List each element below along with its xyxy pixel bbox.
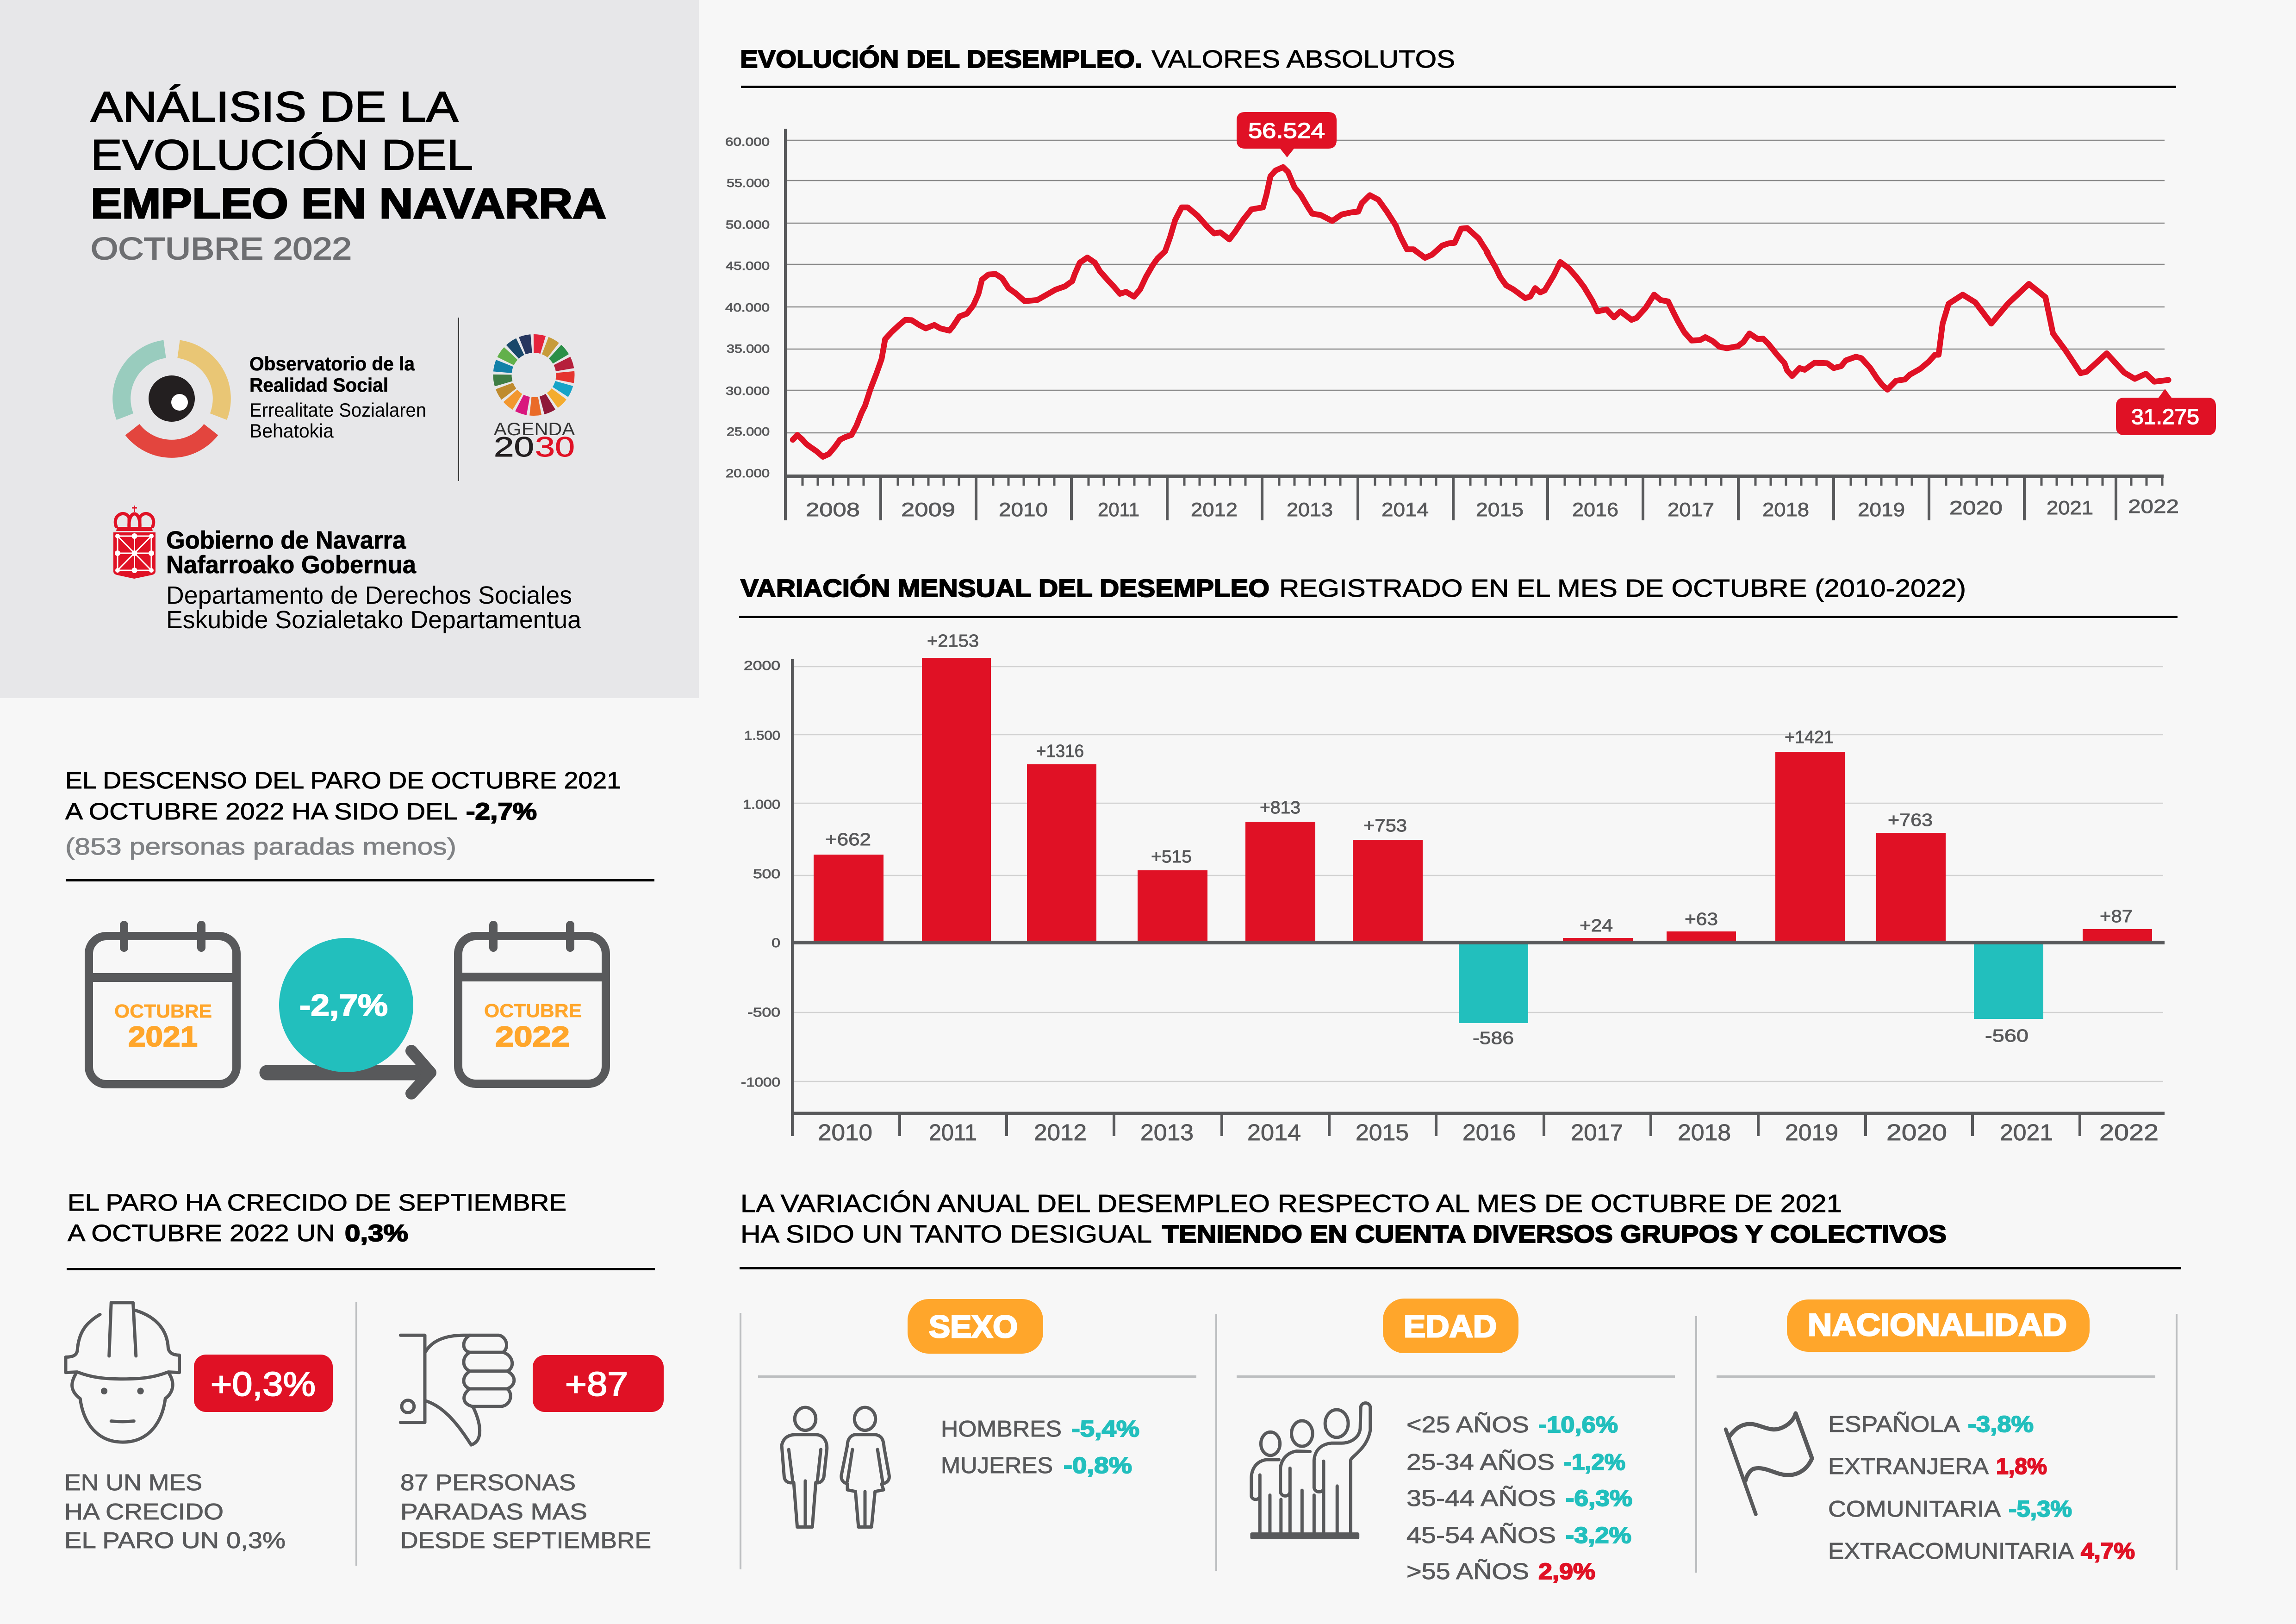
text: Gobierno de Navarra: Eskubide Sozialetako Departamentua [166,606,582,634]
bar value labels: +24 [1580,916,1613,936]
text: Gobierno de Navarra: Nafarroako Gobernua [166,551,417,579]
y axis labels: -1000 [741,1075,780,1089]
data: edad: 35-44 AÑOS [1406,1486,1556,1511]
x axis labels: 2010 [999,499,1048,520]
bar value labels: -560 [1985,1026,2028,1046]
panel: edad [1251,1299,1632,1584]
y axis labels: 0 [772,936,780,950]
data: edad: 25-34 AÑOS [1406,1450,1555,1475]
x axis labels: 2020 [1886,1120,1947,1145]
bar chart: variación mensual [741,631,2165,1145]
text block: descenso: -2,7% [466,798,537,824]
logo: Agenda 2030: 30 [535,431,575,462]
y axis labels: 60.000 [725,136,770,149]
logo: Observatorio de la Realidad Social: Errealitate Sozialaren [249,399,426,421]
chart axes [791,659,2165,1136]
badge: -2,7%: -2,7% [299,988,388,1022]
data: edad: <25 AÑOS [1406,1412,1529,1437]
x axis labels: 2022 [2099,1120,2159,1145]
text block: en un mes: EN UN MES [64,1470,202,1495]
y axis labels: 20.000 [726,467,770,480]
logo: Observatorio de la Realidad Social [122,349,426,449]
y axis labels: 45.000 [726,260,770,273]
callout: maximum 56.524: 56.524 [1248,119,1325,143]
data: nacionalidad: 1,8% [1996,1454,2047,1479]
y axis labels [725,136,770,480]
data: nacionalidad: EXTRANJERA [1828,1454,1989,1479]
data: edad: 2,9% [1538,1559,1595,1584]
data: edad: -3,2% [1566,1523,1631,1548]
text block: crecimiento: 0,3% [345,1220,408,1246]
bar value labels [825,631,2133,1048]
chart axes [785,129,2164,520]
data: nacionalidad: COMUNITARIA [1828,1497,2001,1522]
y axis labels: 2000 [744,658,780,673]
x axis labels: 2018 [1762,499,1809,520]
panel: sexo [782,1299,1139,1527]
icon: thumb down [400,1335,514,1445]
heading: evolución del desempleo [740,45,2176,88]
pill: sexo [908,1299,1043,1354]
text block: descenso: EL DESCENSO DEL PARO DE OCTUBRE 2021 [65,767,621,793]
heading: variación mensual: VARIACIÓN MENSUAL DEL DESEMPLEO [740,575,1269,602]
x axis labels: 2021 [2047,497,2093,518]
icon: group of people [1251,1403,1370,1537]
data: edad: -6,3% [1566,1486,1632,1511]
text block: en un mes: EL PARO UN 0,3% [64,1528,286,1553]
x axis labels: 2008 [806,499,860,520]
x axis labels: 2016 [1462,1120,1516,1145]
text: Gobierno de Navarra: Gobierno de Navarra [166,526,406,554]
icon: worker with helmet [66,1303,180,1442]
text block: 87 personas [400,1470,651,1553]
data: edad: 45-54 AÑOS [1406,1523,1556,1548]
text block: crecimiento: A OCTUBRE 2022 UN [68,1220,335,1246]
panel: nacionalidad [1726,1299,2135,1564]
heading: variación anual [740,1190,2181,1269]
x axis labels: 2020 [1949,497,2003,518]
icon: calendar 2021: OCTUBRE [114,1000,212,1022]
bar value labels: +63 [1685,910,1718,929]
pill: nacionalidad [1787,1299,2090,1352]
y axis labels: 500 [753,867,780,881]
bar value labels: +515 [1151,847,1192,867]
x axis labels: 2014 [1247,1120,1301,1145]
y axis labels: 1.500 [744,728,780,743]
data line [793,167,2168,457]
title: EMPLEO EN NAVARRA [91,180,606,227]
text block: descenso: (853 personas paradas menos) [65,833,456,860]
logo: Agenda 2030: AGENDA [494,419,575,439]
data: edad [1406,1412,1632,1584]
data: edad: -1,2% [1564,1450,1625,1475]
x axis labels: 2015 [1476,499,1524,520]
x axis labels: 2017 [1668,499,1714,520]
y axis labels [741,658,780,1089]
y axis labels: 55.000 [727,177,770,190]
data: sexo: MUJERES [941,1453,1053,1478]
arrow [267,1051,430,1093]
data: edad: -10,6% [1538,1412,1618,1437]
heading: evolución del desempleo: EVOLUCIÓN DEL DESEMPLEO. [740,45,1142,73]
logo: Gobierno de Navarra coat of arms [113,506,156,579]
text block: en un mes: HA CRECIDO [64,1499,224,1524]
heading: variación mensual [739,575,2178,618]
icon: calendar 2022: OCTUBRE [484,1000,582,1021]
callout: current 31.275 [2116,389,2216,435]
bar value labels: +1421 [1785,728,1834,747]
text block: descenso: A OCTUBRE 2022 HA SIDO DEL [65,798,458,824]
x axis labels: 2021 [2000,1120,2053,1145]
badge: +87 [533,1355,664,1412]
heading: variación anual: LA VARIACIÓN ANUAL DEL DESEMPLEO RESPECTO AL MES DE OCTUBRE DE 2021 [740,1190,1842,1218]
data: edad: >55 AÑOS [1406,1559,1529,1584]
bar value labels: +2153 [927,631,979,651]
text block: en un mes [64,1470,286,1553]
x axis labels: 2011 [929,1120,977,1145]
logo: Observatorio de la Realidad Social: Behatokia [249,420,334,442]
bars [814,658,2152,1023]
heading: variación anual: HA SIDO UN TANTO DESIGUAL [740,1220,1152,1248]
panel: title and logos [0,0,699,698]
y axis labels: 30.000 [726,385,770,398]
bar value labels: +87 [2100,907,2133,926]
icon: calendar 2021 [85,925,241,1084]
x axis labels [806,495,2179,520]
data: sexo: HOMBRES [941,1417,1062,1442]
text block: crecimiento [67,1189,655,1270]
data: nacionalidad: EXTRACOMUNITARIA [1828,1539,2074,1564]
y axis labels: -500 [747,1005,780,1019]
heading: variación anual: TENIENDO EN CUENTA DIVERSOS GRUPOS Y COLECTIVOS [1162,1220,1947,1248]
y axis labels: 50.000 [726,219,770,231]
badge: -2,7% [279,938,413,1072]
callout: current 31.275: 31.275 [2131,405,2199,429]
x axis labels: 2017 [1571,1120,1623,1145]
bar value labels: +813 [1260,798,1300,818]
bar value labels: +763 [1888,811,1933,830]
x axis labels: 2016 [1572,499,1618,520]
x axis labels: 2010 [818,1120,872,1145]
heading: evolución del desempleo: VALORES ABSOLUTOS [1151,45,1455,73]
x axis labels [818,1120,2159,1145]
heading: variación mensual: REGISTRADO EN EL MES DE OCTUBRE (2010-2022) [1279,575,1966,602]
callout: maximum 56.524 [1237,112,1337,157]
x axis labels: 2015 [1356,1120,1409,1145]
data: sexo: -5,4% [1071,1417,1139,1442]
x axis labels: 2009 [901,499,955,520]
text block: descenso [65,767,654,881]
text block: 87 personas: 87 PERSONAS [400,1470,576,1495]
y axis labels: 25.000 [727,425,770,438]
badge: +87: +87 [565,1366,628,1403]
data: nacionalidad: -5,3% [2009,1497,2072,1522]
badge: +0,3%: +0,3% [211,1366,316,1403]
y axis labels: 1.000 [743,797,780,812]
x axis labels: 2019 [1858,499,1905,520]
title: EVOLUCIÓN DEL [91,131,473,179]
panel: descenso interanual [65,767,654,1093]
panel: crecimiento mensual [64,1189,664,1566]
data: nacionalidad: ESPAÑOLA [1828,1412,1960,1437]
text: Gobierno de Navarra [166,526,582,634]
data: sexo: -0,8% [1064,1453,1132,1478]
text block: 87 personas: DESDE SEPTIEMBRE [400,1528,651,1553]
badge: +0,3% [194,1355,333,1412]
text: Gobierno de Navarra: Departamento de Derechos Sociales [166,581,572,609]
pill: nacionalidad: NACIONALIDAD [1808,1307,2067,1343]
bar value labels: +753 [1363,816,1407,836]
data: nacionalidad: 4,7% [2081,1539,2135,1564]
data: nacionalidad: -3,8% [1968,1412,2034,1437]
line chart: valores absolutos [725,112,2216,520]
data: sexo [941,1417,1139,1478]
logo: Agenda 2030: 20 [494,431,534,462]
x axis labels: 2013 [1287,499,1333,520]
bar value labels: -586 [1473,1029,1514,1048]
y axis labels: 35.000 [727,343,770,356]
icon: calendar 2021: 2021 [128,1021,198,1052]
icon: flag [1726,1413,1812,1514]
logo: Observatorio de la Realidad Social: Observatorio de la [249,353,415,375]
icon: calendar 2022 [454,925,610,1084]
pill: sexo: SEXO [929,1309,1018,1344]
x axis labels: 2011 [1098,499,1139,520]
subtitle: date: OCTUBRE 2022 [91,231,352,266]
y axis labels: 40.000 [725,301,770,314]
title [91,83,606,227]
x axis labels: 2012 [1034,1120,1087,1145]
x axis labels: 2014 [1381,499,1429,520]
logo: Agenda 2030 [494,344,575,462]
x axis labels: 2013 [1140,1120,1194,1145]
x axis labels: 2022 [2128,495,2179,517]
bar value labels: +662 [825,830,871,849]
data: nacionalidad [1828,1412,2135,1564]
x axis labels: 2012 [1191,499,1238,520]
icon: man and woman [782,1407,889,1527]
x axis labels: 2019 [1785,1120,1838,1145]
logo: Observatorio de la Realidad Social: Realidad Social [249,374,388,396]
icon: calendar 2022: 2022 [495,1021,570,1052]
text block: crecimiento: EL PARO HA CRECIDO DE SEPTIEMBRE [68,1189,566,1216]
bar value labels: +1316 [1036,742,1084,761]
text block: 87 personas: PARADAS MAS [400,1499,587,1524]
pill: edad [1383,1299,1518,1353]
x axis labels: 2018 [1678,1120,1731,1145]
title: ANÁLISIS DE LA [91,83,459,131]
pill: edad: EDAD [1404,1309,1497,1344]
